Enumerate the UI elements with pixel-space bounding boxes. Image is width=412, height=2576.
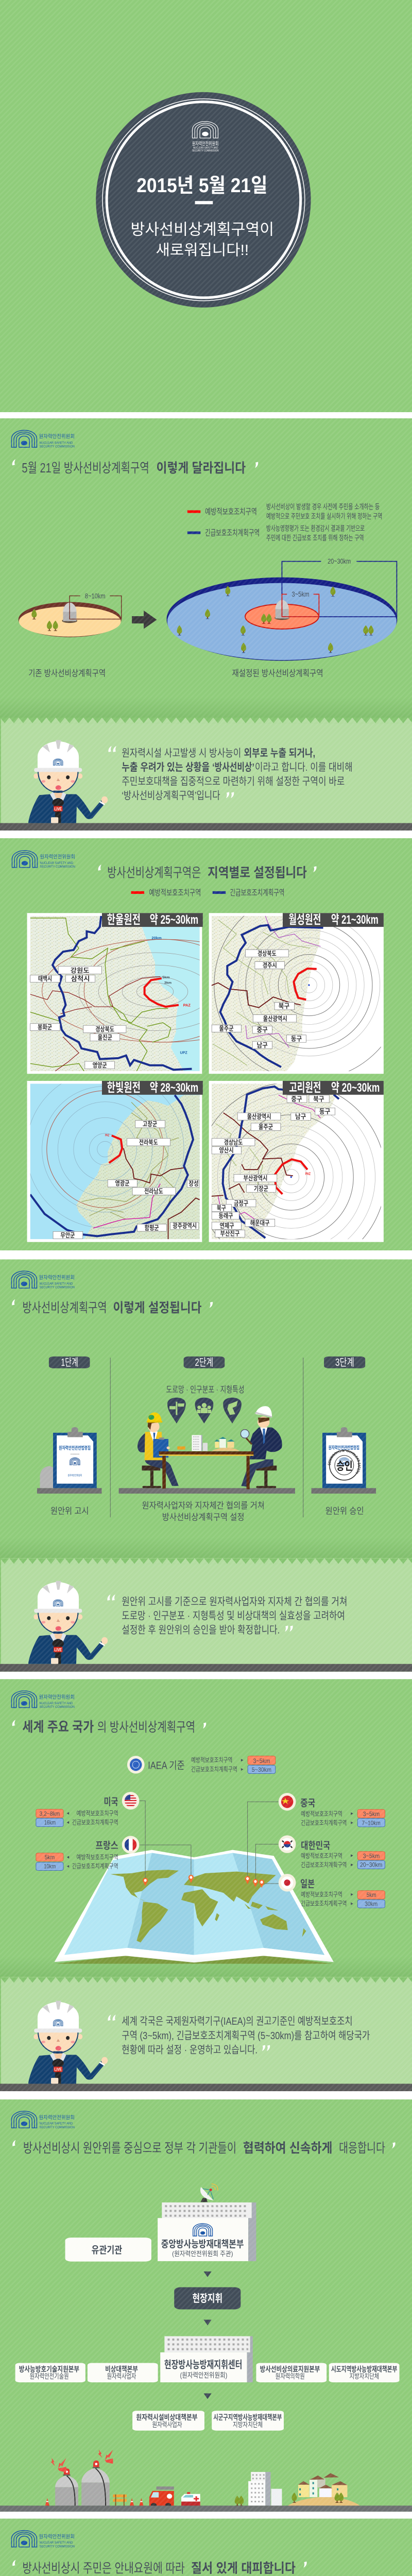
map card: Kori: 부산광역시: [243, 1175, 267, 1182]
label: central HQ: [161, 2239, 244, 2258]
step pill 1: 1단계: [61, 1357, 78, 1368]
legend: zones: [187, 502, 382, 542]
text: criteria: 도로망 · 인구분포 · 지형특성: [166, 1384, 244, 1395]
heading: 방사선비상계획구역: [22, 1300, 107, 1315]
map card: Hanbit: 함평군: [145, 1224, 159, 1231]
panel: zones by region: 긴급보호조치계획구역: [230, 888, 285, 897]
map card: Hanbit: 고창군: [143, 1121, 157, 1128]
caption: step 2: [142, 1500, 265, 1522]
arrow: [132, 611, 157, 629]
block: USA: [36, 1792, 139, 1826]
map card: Wolsong: [209, 913, 384, 1074]
box: emergency HQ: 비상대책본부: [105, 2365, 138, 2374]
legend: zones: 예방적보호조치구역: [205, 507, 257, 517]
map card: Wolsong: 월성원전: [288, 913, 321, 927]
logo: commission: 원자력안전위원회: [39, 2533, 75, 2539]
step pill 3: 3단계: [335, 1357, 354, 1368]
map card: Hanbit: 무안군: [60, 1232, 75, 1239]
map card: Hanbit: 약 28~30km: [150, 1081, 198, 1095]
panel: how zones are set: [0, 1270, 412, 1672]
box: facility HQ: [132, 2411, 204, 2431]
block: IAEA standard: IAEA 기준: [148, 1760, 185, 1771]
diagram: existing zone: 8~10km: [85, 592, 106, 600]
box: related agencies: 유관기관: [92, 2245, 122, 2256]
logo: commission: [11, 1271, 75, 1289]
panel: government response: [0, 2111, 412, 2512]
floor: step 1: [37, 1488, 101, 1494]
icon: map pins: [143, 1875, 264, 1888]
heading: 질서 있게 대피합니다: [191, 2561, 296, 2575]
callout text: [108, 2014, 370, 2056]
block: Japan: 30km: [365, 1901, 377, 1908]
block: China: 중국: [300, 1798, 315, 1809]
block: France: 긴급보호조치계획구역: [72, 1863, 118, 1870]
map card: Hanbit: 광주광역시: [173, 1222, 197, 1230]
block: France: 5km: [45, 1854, 55, 1861]
icon: reporter: [28, 1581, 108, 1664]
map card: Hanul: 삼척시: [71, 975, 90, 982]
block: China: [279, 1793, 385, 1827]
heading: 방사선비상시 주민은 안내요원에 따라: [22, 2561, 185, 2575]
map card: Hanbit: 전라남도: [144, 1188, 163, 1195]
map card: Hanbit: [26, 1071, 203, 1242]
icon: reporter: LIVE: [55, 807, 62, 811]
icon: clipboard approval: [322, 1427, 366, 1488]
block: Japan: 5km: [367, 1892, 376, 1899]
block: IAEA standard: 긴급보호조치계획구역: [191, 1766, 237, 1773]
map card: Hanul: PAZ: [183, 1003, 191, 1007]
block: France: [36, 1836, 139, 1871]
map card: Hanul: 영양군: [93, 1062, 107, 1069]
map card: Hanbit: 한빛원전: [107, 1081, 141, 1095]
illustration: barricade and cones: [45, 2495, 144, 2505]
box: emergency HQ: 원자력사업자: [107, 2372, 136, 2380]
block: USA: 3,2~8km: [40, 1810, 60, 1818]
block: China: 예방적보호조치구역: [301, 1810, 342, 1818]
logo: commission: [11, 430, 75, 448]
callout: reporter on zone setting: [0, 1537, 412, 1672]
arrow: [203, 2393, 212, 2399]
label: central HQ: (원자력안전위원회 주관): [172, 2250, 233, 2258]
map card: Hanul: 한울원전: [107, 913, 141, 927]
map card: Kori: 중구: [291, 1096, 302, 1103]
box: provincial HQ: [329, 2363, 400, 2382]
floor: step 3: [312, 1488, 376, 1494]
map card: Kori: 고리원전: [289, 1081, 321, 1095]
box: medical support: 방사선비상의료지원본부: [260, 2365, 320, 2374]
map card: Kori: 남구: [295, 1113, 306, 1121]
heading: 5월 21일 방사선비상계획구역: [22, 460, 149, 475]
icon: reporter: LIVE: [55, 1648, 62, 1652]
diagram: existing zone: [19, 592, 122, 637]
map card: Kori: 북구: [313, 1095, 324, 1103]
map card: Wolsong: 남구: [256, 1042, 268, 1049]
map card: Kori: 동래구: [218, 1212, 233, 1219]
block: South Korea: [279, 1835, 385, 1869]
block: IAEA standard: 3~5km: [253, 1758, 270, 1765]
panel: zones by region: [12, 851, 404, 1272]
icon: satellite dish: [200, 2184, 218, 2202]
block: South Korea: 대한민국: [301, 1840, 330, 1851]
logo: commission: SECURITY COMMISSION: [40, 1705, 75, 1709]
map card: Hanul: 약 25~30km: [150, 913, 198, 927]
box: local HQ: 지방자치단체: [233, 2421, 263, 2429]
illustration: workers at table: [138, 1406, 282, 1489]
caption: step 2: 방사선비상계획구역 설정: [162, 1512, 244, 1522]
block: Japan: 일본: [300, 1878, 315, 1890]
block: France: 예방적보호조치구역: [76, 1854, 118, 1861]
map card: Hanul: 울진군: [98, 1034, 112, 1041]
panel: government response: 시군구지역방사능방재대책본부: [213, 2413, 282, 2421]
building: field center: 현장방사능방재지휘센터: [164, 2359, 242, 2370]
legend: 예방적보호조치구역: [149, 888, 201, 897]
callout text: ‘방사선비상’: [212, 761, 254, 773]
map card: Hanbit: 전라북도: [139, 1139, 158, 1146]
callout text: 현황에 따라 설정 · 운영하고 있습니다.: [122, 2044, 258, 2056]
map card: Kori: 기장군: [254, 1185, 268, 1193]
map card: Hanul: 20km: [151, 936, 162, 940]
caption: step 2: 원자력사업자와 지자체간 협의를 거쳐: [142, 1500, 265, 1511]
map card: Hanul: 태백시: [38, 975, 52, 982]
logo: commission: [11, 1691, 75, 1709]
building: field center: (원자력안전위원회): [180, 2371, 227, 2379]
map card: Kori: 경상남도: [224, 1139, 243, 1146]
block: South Korea: 20~30km: [360, 1861, 382, 1869]
panel: major countries: [0, 1691, 412, 2091]
callout text: ‘방사선비상계획구역’입니다: [122, 789, 220, 802]
logo: commission: NUCLEAR SAFETY AND: [40, 861, 74, 865]
callout text: [108, 746, 353, 802]
legend: [131, 888, 285, 897]
logo: commission: NUCLEAR SAFETY AND: [40, 441, 73, 445]
step pill 1: [49, 1357, 90, 1368]
map card: Kori: 동구: [319, 1108, 330, 1115]
logo: commission: NUCLEAR SAFETY AND: [40, 2541, 73, 2545]
panel: resident evacuation: [0, 2531, 412, 2576]
block: IAEA standard: 5~30km: [252, 1767, 271, 1773]
map card: Hanul: [27, 913, 203, 1074]
callout text: 외부로 누출 되거나,: [244, 747, 315, 759]
callout text: [107, 1595, 347, 1636]
step pill 3: [324, 1357, 365, 1368]
caption: existing zone: 기존 방사선비상계획구역: [28, 668, 106, 678]
map card: Kori: PAZ: [305, 1172, 311, 1176]
caption: step 3: 원안위 승인: [325, 1505, 364, 1516]
logo: commission: SECURITY COMMISSION: [40, 2545, 75, 2548]
box: radiation support: 방사능방호기술지원본부: [19, 2365, 79, 2374]
floor band: [0, 2505, 412, 2512]
icon: clipboard notice: 원자력안전관련법령집: [59, 1445, 91, 1451]
box: local HQ: [212, 2411, 284, 2431]
block: Japan: 예방적보호조치구역: [301, 1891, 342, 1899]
map card: Wolsong: 경상북도: [258, 950, 277, 957]
map card: Kori: 연제구: [220, 1222, 234, 1230]
building: central HQ: [158, 2202, 256, 2261]
arrow: [203, 2272, 212, 2277]
logo: commission: NUCLEAR SAFETY AND: [40, 2122, 73, 2125]
block: South Korea: 예방적보호조치구역: [301, 1852, 342, 1860]
connector lines: [139, 1801, 279, 1884]
heading: 이렇게 설정됩니다: [113, 1300, 201, 1315]
block: USA: 미국: [104, 1797, 118, 1807]
subtitle: 방사선비상계획구역이: [131, 221, 274, 238]
panel: what changes: [0, 430, 412, 831]
block: China: 7~10km: [362, 1820, 381, 1827]
map card: Hanul: UPZ: [180, 1050, 187, 1055]
callout: reporter on global standards: [0, 1956, 412, 2091]
map card: Wolsong: 중구: [256, 1027, 268, 1033]
box: radiation support: [15, 2363, 85, 2382]
icon: ambulance: [181, 2492, 200, 2505]
divider dash: [195, 201, 213, 204]
box: related agencies: [65, 2238, 151, 2262]
heading: 세계 주요 국가: [22, 1719, 94, 1735]
block: IAEA standard: [127, 1756, 276, 1774]
block: France: 프랑스: [95, 1840, 118, 1851]
map card: Kori: 금정구: [234, 1200, 248, 1207]
map card: Wolsong: 북구: [279, 1003, 289, 1010]
logo: white commission emblem: NUCLEAR SAFETY AND: [193, 147, 218, 149]
map card: Kori: 양산시: [219, 1147, 234, 1154]
callout text: 원자력시설 사고발생 시 방사능이: [122, 747, 241, 759]
diagram: reset zones: 3~5km: [291, 590, 310, 598]
title: date: 2015년 5월 21일: [136, 175, 267, 197]
illustration: town: [235, 2472, 360, 2506]
icon: clipboard approval: 원자력안전관련법령집: [329, 1445, 359, 1450]
illustration: world map: [55, 1850, 334, 1964]
icon: reporter: LIVE: [55, 2067, 62, 2072]
icon: clipboard approval: COMMISSION NUCLEAR SAFETY: [328, 1450, 360, 1475]
map card: Hanbit: PAZ: [105, 1133, 109, 1137]
box: medical support: [256, 2363, 327, 2382]
icon: location pins: [167, 1398, 242, 1423]
panel: hero cover: 원자력안전위원회: [192, 141, 218, 147]
logo: commission: NUCLEAR SAFETY AND: [40, 1282, 73, 1285]
map card: Kori: 북구: [217, 1205, 226, 1212]
heading: 협력하여 신속하게: [243, 2140, 332, 2155]
map card: Wolsong: 울주군: [219, 1025, 234, 1032]
map card: Wolsong: 경주시: [263, 962, 277, 969]
map card: Hanul: 경상북도: [95, 1026, 114, 1033]
map card: Wolsong: 울산광역시: [263, 1015, 287, 1022]
box: emergency HQ: [88, 2363, 158, 2382]
floor: step 2: [119, 1488, 295, 1494]
building: field center: [160, 2336, 253, 2382]
block: France: 10km: [44, 1863, 56, 1870]
block: IAEA standard: 예방적보호조치구역: [191, 1756, 233, 1764]
block: China: 긴급보호조치계획구역: [301, 1819, 347, 1827]
logo: commission: [12, 851, 75, 869]
diagram: reset zones: 20~30km: [328, 557, 351, 565]
heading: [12, 1719, 206, 1735]
logo: commission: 원자력안전위원회: [39, 2114, 75, 2121]
logo: commission: NUCLEAR SAFETY AND: [40, 1701, 73, 1705]
box: radiation support: 원자력안전기술원: [30, 2372, 69, 2380]
logo: commission: SECURITY COMMISSION: [40, 865, 75, 869]
arrow: [203, 2320, 212, 2326]
box: medical support: 원자력의학원: [276, 2372, 305, 2380]
block: USA: 예방적보호조치구역: [76, 1810, 118, 1817]
icon: reporter: [28, 740, 108, 823]
box: field command: [174, 2287, 241, 2310]
map card: Wolsong: 동구: [291, 1036, 302, 1043]
box: provincial HQ: 지방자치단체: [350, 2372, 379, 2380]
map card: Kori: 부산진구: [220, 1230, 239, 1238]
icon: fire truck: [149, 2486, 174, 2507]
block: USA: 16km: [44, 1819, 56, 1826]
legend: zones: 긴급보호조치계획구역: [205, 528, 260, 538]
step pill 2: [184, 1357, 225, 1368]
map card: Kori: 울주군: [259, 1124, 273, 1131]
panel: hero cover: [96, 92, 311, 308]
callout: reporter on radiation emergency: [0, 697, 412, 831]
logo: commission: 원자력안전위원회: [39, 1694, 75, 1700]
diagram: reset zones: [166, 557, 397, 661]
logo: commission: SECURITY COMMISSION: [40, 445, 75, 448]
block: South Korea: 3~5km: [363, 1853, 380, 1860]
icon: clipboard notice: [40, 1427, 97, 1488]
block: South Korea: 긴급보호조치계획구역: [301, 1861, 347, 1869]
logo: commission: [11, 2531, 75, 2548]
callout text: 누출 우려가 있는 상황을: [122, 761, 210, 773]
logo: commission: 원자력안전위원회: [39, 1275, 75, 1280]
logo: white commission emblem: [192, 122, 218, 152]
icon: clipboard approval: 승인: [336, 1460, 353, 1472]
map card: Kori: [209, 1081, 384, 1242]
caption: step 1: 원안위 고시: [50, 1505, 89, 1516]
heading: 이렇게 달라집니다: [157, 460, 246, 475]
block: Japan: 긴급보호조치계획구역: [301, 1900, 347, 1907]
map card: Hanul: 5km: [162, 975, 170, 979]
map card: Kori: 해운대구: [250, 1219, 269, 1227]
label: central HQ: 중앙방사능방재대책본부: [161, 2239, 244, 2250]
map card: Kori: 울산광역시: [247, 1113, 271, 1121]
map card: Hanbit: 장성: [188, 1180, 199, 1188]
callout text: 설정한 후 원안위의 승인을 받아 확정합니다.: [122, 1623, 280, 1636]
heading: 방사선비상계획구역은: [107, 865, 201, 880]
map card: Hanul: 강원도: [71, 967, 89, 974]
icon: clipboard notice: 원자력안전위원회: [68, 1473, 82, 1477]
box: facility HQ: 원자력사업자: [152, 2421, 182, 2429]
heading: 지역별로 설정됩니다: [208, 865, 307, 880]
block: China: 3~5km: [363, 1811, 380, 1818]
logo: commission: 원자력안전위원회: [40, 854, 75, 860]
block: USA: 긴급보호조치계획구역: [72, 1819, 118, 1826]
illustration: nuclear plants with sirens: [51, 2450, 113, 2505]
badge: dark circle: [96, 92, 311, 308]
logo: white commission emblem: SECURITY COMMISSION: [192, 149, 218, 152]
logo: commission: SECURITY COMMISSION: [40, 2125, 75, 2129]
map card: Hanbit: 영광군: [115, 1180, 130, 1187]
map card: Hanul: 3km: [164, 981, 171, 985]
icon: reporter: [28, 2001, 108, 2083]
logo: commission: 원자력안전위원회: [39, 433, 75, 439]
subtitle: 새로워집니다!!: [156, 242, 249, 259]
logo: commission: SECURITY COMMISSION: [40, 1285, 75, 1289]
caption: reset zone: 재설정된 방사선비상계획구역: [232, 668, 323, 678]
box: field command: 현장지휘: [192, 2292, 222, 2304]
block: Japan: [279, 1874, 385, 1908]
map card: Hanul: 봉화군: [38, 1024, 52, 1031]
logo: commission: [11, 2111, 75, 2129]
heading: 의 방사선비상계획구역: [97, 1720, 195, 1735]
step pill 2: 2단계: [195, 1357, 213, 1368]
subtitle: [131, 221, 274, 259]
box: facility HQ: 원자력시설비상대책본부: [136, 2413, 198, 2421]
